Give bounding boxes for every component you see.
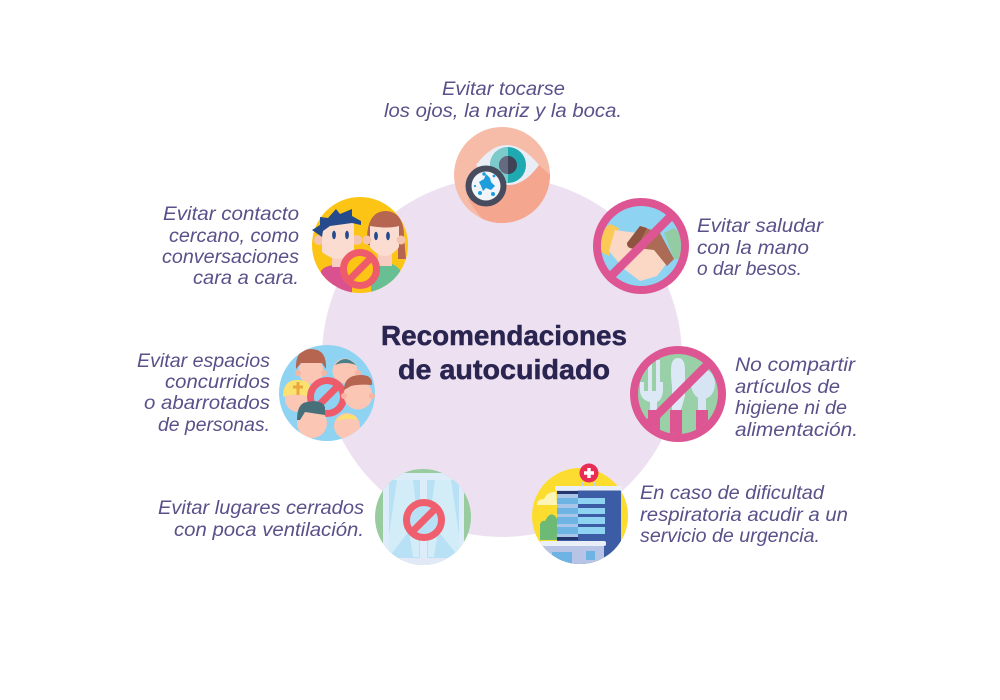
text: no sharing items: artículos de <box>735 377 840 398</box>
person: top left <box>295 349 327 384</box>
text: seek emergency care <box>640 483 848 547</box>
text: avoid crowded spaces: de personas. <box>158 415 270 436</box>
icon: crowd of people <box>279 345 375 441</box>
text: avoid touching face: Evitar tocarse <box>442 79 565 100</box>
text: avoid crowded spaces: concurridos <box>165 372 271 393</box>
icon: two people talking <box>312 197 408 293</box>
text: avoid close contact: cara a cara. <box>193 268 299 289</box>
text: avoid touching face: los ojos, la nariz y la boca. <box>384 101 622 122</box>
title: Recomendaciones <box>381 320 627 351</box>
icon: hospital building <box>532 464 628 565</box>
central lilac circle <box>322 177 682 537</box>
text: avoid close contact: conversaciones <box>162 247 300 268</box>
text: avoid touching face <box>384 79 622 122</box>
text: no sharing items <box>735 355 858 441</box>
text: avoid closed places: Evitar lugares cerrados <box>158 498 365 519</box>
icon: forbidden cutlery <box>630 346 726 442</box>
title: de autocuidado <box>398 354 610 385</box>
text: no handshakes <box>697 216 824 280</box>
boy <box>312 209 362 267</box>
person: top right <box>332 358 361 384</box>
text: avoid crowded spaces: o abarrotados <box>144 393 271 414</box>
girl <box>362 211 406 266</box>
text: seek emergency care: servicio de urgencia. <box>640 526 820 547</box>
text: seek emergency care: respiratoria acudir a un <box>640 505 848 526</box>
text: avoid closed places <box>158 498 365 541</box>
text: avoid close contact: Evitar contacto <box>163 204 299 225</box>
text: avoid close contact <box>162 204 300 289</box>
text: no handshakes: con la mano <box>697 238 809 259</box>
person: bottom right <box>334 413 360 439</box>
icon: forbidden handshake <box>593 198 689 294</box>
text: seek emergency care: En caso de dificultad <box>640 483 825 504</box>
text: no sharing items: alimentación. <box>735 420 858 441</box>
text: no handshakes: o dar besos. <box>697 259 802 280</box>
text: avoid closed places: con poca ventilación. <box>174 520 364 541</box>
person: bottom centre <box>297 401 327 438</box>
text: no handshakes: Evitar saludar <box>697 216 824 237</box>
text: avoid close contact: cercano, como <box>169 226 299 247</box>
text: no sharing items: higiene ni de <box>735 398 847 419</box>
icon: closed window <box>375 469 471 569</box>
text: avoid crowded spaces: Evitar espacios <box>137 351 271 372</box>
text: no sharing items: No compartir <box>735 355 856 376</box>
text: avoid crowded spaces <box>137 351 271 436</box>
title <box>381 320 627 385</box>
person: right <box>341 375 375 410</box>
person: left with cross <box>283 380 312 412</box>
icon: eye and virus <box>454 127 550 223</box>
